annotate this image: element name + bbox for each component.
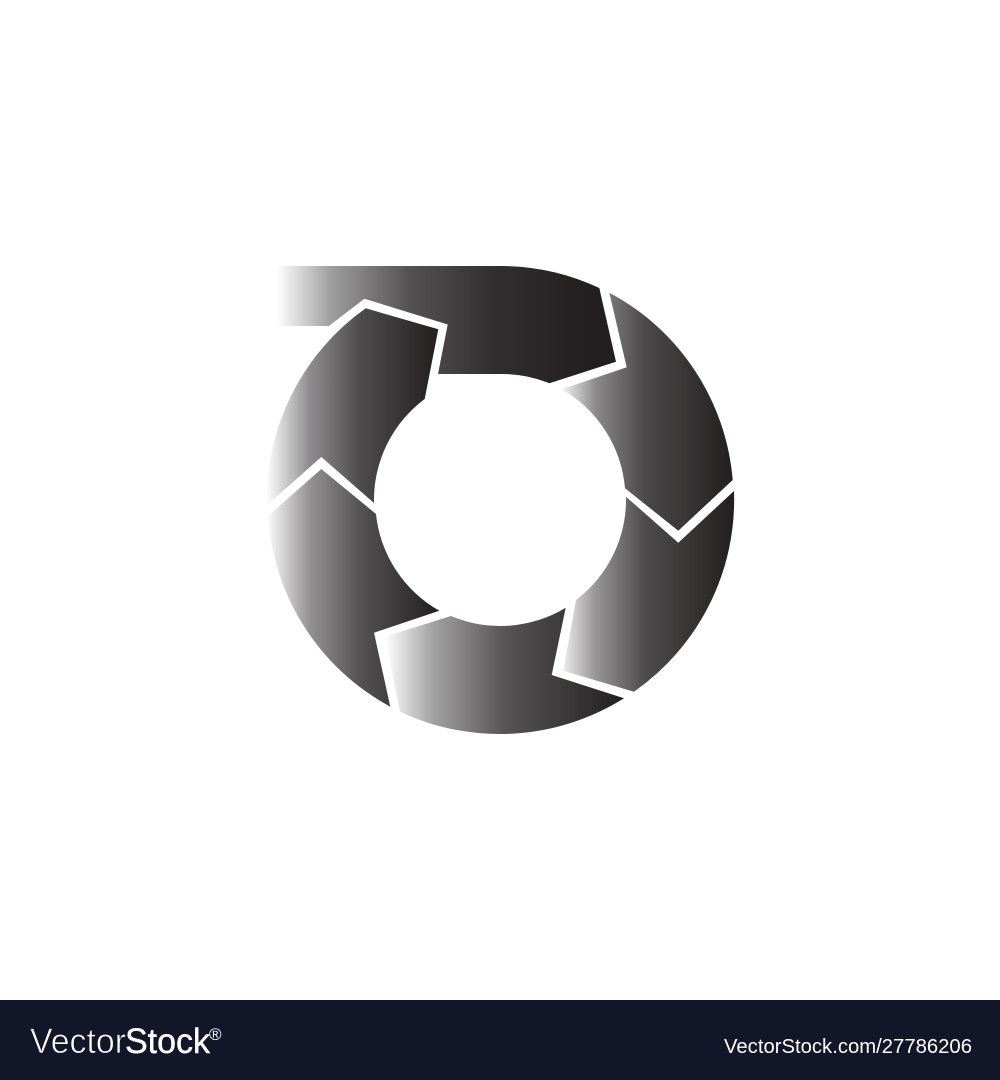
footer logo: VectorStock: Stock <box>125 1022 210 1061</box>
footer image id text: VectorStock.com/27786206 <box>724 1036 972 1058</box>
footer bar <box>0 1000 1000 1080</box>
footer logo: VectorStock <box>30 1022 222 1061</box>
arrow: lower-left segment <box>268 469 439 707</box>
arrow: top segment with tail <box>277 266 616 383</box>
arrow: lower-right segment <box>563 491 734 692</box>
arrow: bottom segment <box>385 608 624 734</box>
arrow: upper-left segment <box>267 308 438 505</box>
arrow: upper-right segment <box>562 293 733 531</box>
circular arrow ring <box>267 266 734 734</box>
footer logo: VectorStock: ® <box>209 1025 222 1044</box>
footer logo: VectorStock: Vector <box>30 1022 126 1061</box>
